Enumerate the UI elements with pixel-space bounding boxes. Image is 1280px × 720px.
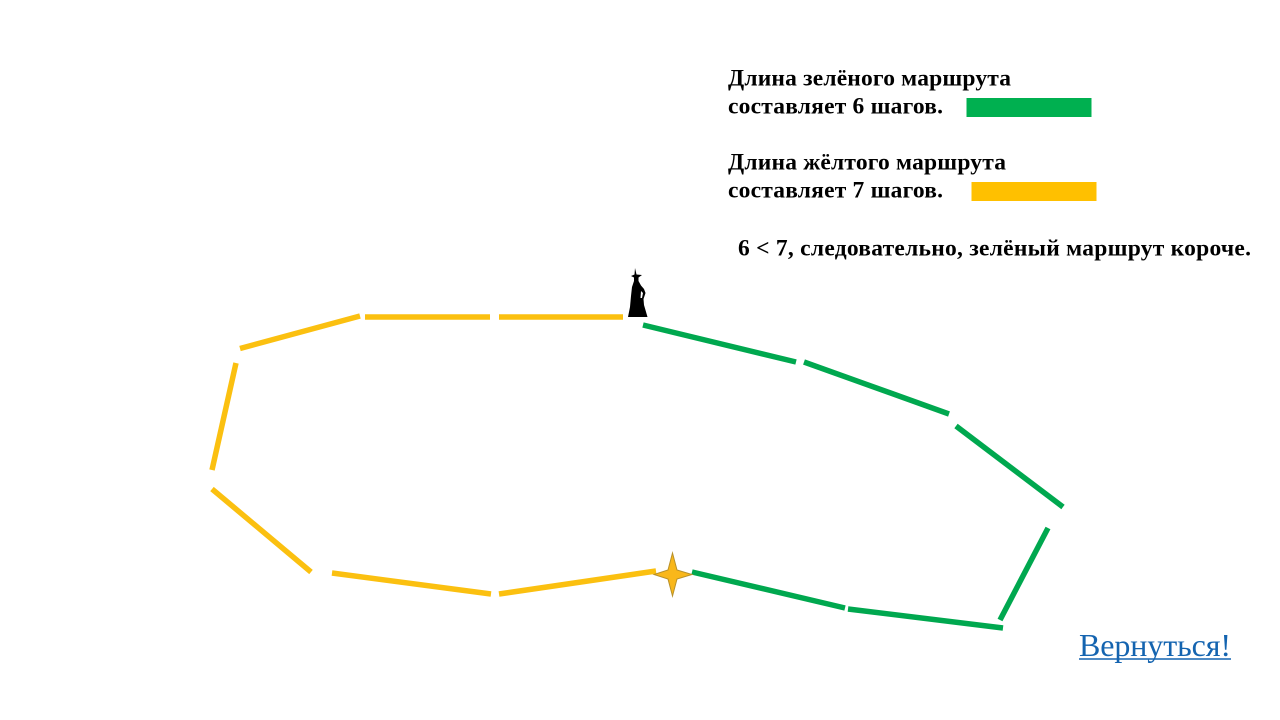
green route length text: Длина зелёного маршрута bbox=[728, 66, 1011, 92]
icon: witch silhouette at start bbox=[628, 268, 648, 317]
back link: Вернуться! bbox=[1079, 627, 1231, 663]
yellow route length text bbox=[728, 150, 1006, 204]
green route length text: составляет 6 шагов. bbox=[728, 94, 943, 120]
green route length text bbox=[728, 66, 1011, 120]
yellow route length text: составляет 7 шагов. bbox=[728, 178, 943, 204]
yellow route bbox=[212, 316, 656, 594]
yellow legend bar bbox=[972, 182, 1096, 201]
icon: gold four-point star at finish bbox=[654, 553, 692, 596]
green route bbox=[643, 325, 1063, 628]
green legend bar bbox=[966, 98, 1092, 117]
conclusion text: 6 < 7, следовательно, зелёный маршрут короче. bbox=[738, 236, 1251, 262]
yellow route length text: Длина жёлтого маршрута bbox=[728, 150, 1006, 176]
